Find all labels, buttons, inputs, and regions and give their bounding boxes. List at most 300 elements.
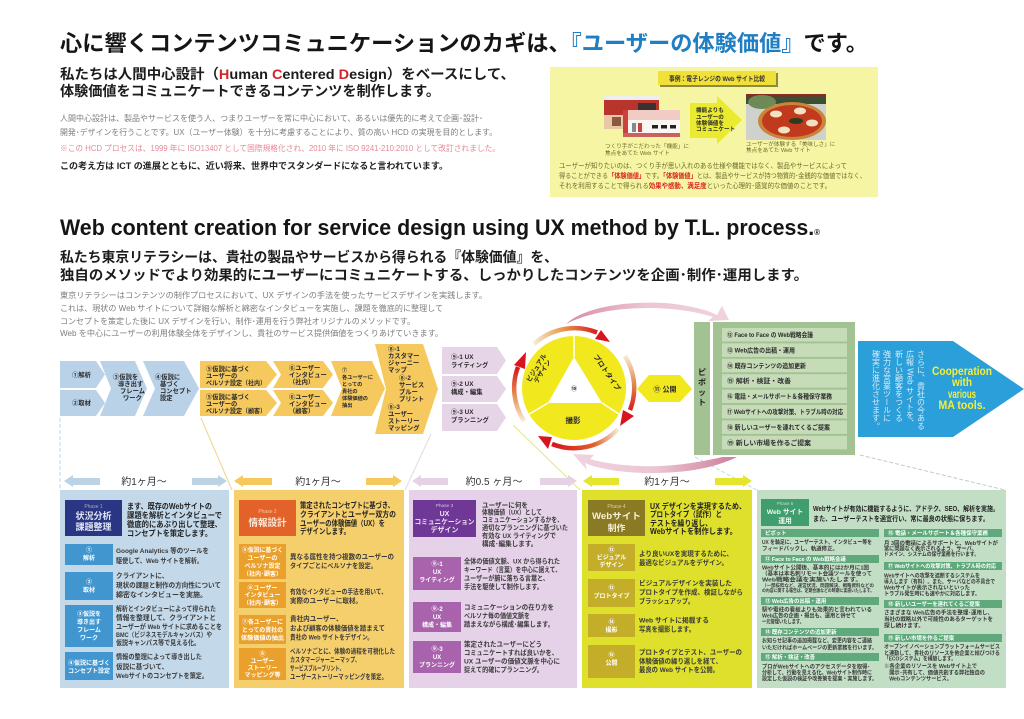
- step: visual design: ⑫: [608, 546, 615, 554]
- text block: method description: コンセプトを策定した後に UX デザインを行い、制作･運用を行う弊社オリジナルのメソッドです。: [60, 316, 415, 326]
- timeline: phase 2: [234, 475, 402, 488]
- timeline: phase 3: [412, 475, 577, 488]
- step: UX planning: [413, 640, 560, 674]
- process: purple phase chevrons: 構成・編集: [451, 387, 483, 396]
- step: UX planning: プランニング: [419, 661, 455, 669]
- callout: MA tools arrow: さらに、貴社の今ある: [916, 350, 926, 430]
- step: framework: 解析とインタビューによって得られた: [116, 604, 216, 613]
- step: publish: 最良の Web サイトを公開。: [639, 665, 719, 674]
- process: purple phase chevrons: ⑨-2 UX: [451, 379, 474, 388]
- process: blue phase chevrons: 導き出す: [118, 379, 143, 388]
- process: yellow phase chevrons: （顧客）: [289, 406, 314, 415]
- timeline: phase 4: 約1ヶ月〜: [644, 475, 690, 488]
- process: yellow phase chevrons: ⑧-3: [388, 402, 400, 411]
- step: analysis: Google Analytics 等のツールを: [116, 546, 209, 555]
- step: user interview: [239, 582, 387, 608]
- process: yellow phase chevrons: ⑤仮説に基づく: [206, 364, 250, 373]
- block: security: Webサイトが表示されないといった: [884, 584, 970, 592]
- panel: phase 2: [234, 490, 404, 688]
- process: yellow phase chevrons: ユーザー: [388, 409, 413, 418]
- block: web ads: 駅や電柱の看板よりも効果的と言われている: [762, 606, 872, 614]
- phase 3 header: Phase 3: [436, 503, 454, 509]
- step: visual design: デザイン: [599, 561, 624, 569]
- step: visual design: ビジュアル: [597, 554, 626, 562]
- block: pivot: ピボット: [765, 529, 787, 537]
- block: new users: 当社の戦略以外で可能性のあるターゲットを: [884, 615, 993, 623]
- step: photography: 写真を撮影します。: [639, 624, 695, 634]
- step: persona: 異なる属性を持つ複数のユーザーの: [290, 552, 394, 561]
- step: story mapping: マッピング等: [244, 671, 281, 679]
- case title: 事例：電子レンジの Web サイト比較: [669, 74, 765, 83]
- heading: Tokyo Literacy statement: 独自のメソッドでより効果的にユーザーにコミュニケートする、しっかりしたコンテンツを企画･制作･運用します。: [60, 267, 808, 283]
- arrow: communicate value: 機能よりも: [696, 106, 724, 114]
- step: visual design: 最適なビジュアルをデザイン。: [639, 558, 728, 567]
- text block: HCD description: 人間中心設計は、製品やサービスを使う人、つまりユーザーを常に中心において、あるいは優先的に考えて企画･設計･: [60, 113, 483, 123]
- block: pivot: UX を軸足に、ユーザーテスト、インタビュー等を: [762, 538, 872, 546]
- phase 3 intro: 適切なプランニングに基づいた: [482, 523, 568, 532]
- callout: MA tools arrow: 強力な営業ツールに: [882, 349, 892, 422]
- phase 2 intro: [300, 500, 396, 536]
- phase 1 intro: 徹底的にあぶり出して整理、: [127, 519, 222, 529]
- process: blue phase chevrons: コンセプト: [160, 387, 191, 395]
- block: new markets: ※各企業のリソースを Webサイト上で: [884, 662, 977, 670]
- cycle label: visual design: ビジュアル: [524, 351, 549, 384]
- step: UX structure: UX: [433, 615, 441, 621]
- step: story mapping: ユーザー: [251, 657, 274, 665]
- step: interview: クライアントに、: [116, 571, 168, 580]
- phase 2 intro: 策定されたコンセプトに基づき、: [300, 500, 394, 510]
- chart: prototype cycle: [511, 325, 637, 451]
- step: concept: ④仮説に基づく: [68, 659, 110, 667]
- step: framework: 導き出す: [77, 618, 101, 626]
- phase 3 header: コミュニケーション: [414, 518, 474, 526]
- step: framework: ワーク: [80, 634, 98, 642]
- step: analysis: [65, 544, 209, 565]
- step: framework: [65, 604, 222, 647]
- text block: method description: これは、現状の Web サイトについて詳細な解析と綿密なインタビューを実施し、課題を徹底的に整理して: [60, 303, 443, 313]
- block: existing content: ⑭ 既存コンテンツの追加更新: [765, 628, 837, 636]
- photo: pizza: [746, 94, 826, 140]
- step: UX writing: ⑨-1: [431, 560, 443, 568]
- arrow: communicate value: [690, 96, 742, 144]
- process: yellow phase chevrons: 抽出: [342, 401, 352, 409]
- process: blue phase chevrons: フレーム: [120, 387, 145, 395]
- step: UX structure: 踏まえながら構成･編集します。: [464, 620, 554, 628]
- step: story mapping: ペルソナごとに、体験の過程を可視化した: [290, 646, 395, 656]
- phase 3 intro: ユーザーに何を: [482, 500, 528, 510]
- step: UX structure: ペルソナ毎の価値文脈を: [464, 611, 530, 620]
- process: yellow phase chevrons: インタビュー: [289, 370, 327, 379]
- step: visual design: より良いUXを実現するために、: [639, 549, 733, 558]
- title: 心に響くコンテンツコミュニケーションのカギは、『ユーザーの体験価値』です。: [60, 31, 868, 56]
- text block: case explanation: それを利用することで得られる効果や感動、満足度といった心理的･感覚的な価値のことです。: [559, 181, 831, 190]
- phase 1 intro: コンセプトを策定します。: [127, 528, 212, 538]
- panel: pivot label: [694, 322, 710, 455]
- block: security: トラブル発生時にも速やかに対応します。: [884, 590, 980, 598]
- process: purple phase chevrons: ライティング: [451, 360, 489, 369]
- process: yellow phase chevrons: 各ユーザーに: [342, 373, 373, 381]
- step: prototype: [588, 578, 743, 607]
- phase 1 intro: [127, 501, 222, 538]
- panel: phase 1: [60, 490, 229, 688]
- block: new users: [884, 600, 1002, 630]
- phase 4 header: [588, 500, 645, 536]
- step: persona: [239, 544, 394, 579]
- phase 2 header: [239, 500, 296, 536]
- panel: phase 3: [409, 490, 577, 688]
- arrow: communicate value: 体験価値を: [696, 119, 724, 127]
- heading: human centered design: 体験価値をコミュニケートできるコンテンツを制作します。: [60, 83, 440, 99]
- process: purple phase chevrons: プランニング: [451, 415, 489, 424]
- timeline: phase 2: 約1ヶ月〜: [295, 475, 341, 488]
- process: purple phase chevrons: ⑨-1 UX: [451, 352, 474, 361]
- panel: operation list: ⑰ Webサイトへの攻撃対策、トラブル時の対応: [727, 407, 844, 416]
- step: UX planning: UX ユーザーの価値文脈を中心に: [464, 656, 560, 666]
- step: persona: タイプごとにペルソナを設定。: [290, 561, 377, 570]
- step: photography: ⑭: [608, 618, 615, 626]
- block: face to face: Webサイト公開後、基本的には2か月に1回: [762, 564, 869, 572]
- phase 5 header: 運用: [778, 516, 792, 525]
- block: face to face: [761, 555, 879, 594]
- block: new users: さまざまな Web広告の手法を整理･運用し、: [884, 608, 993, 616]
- step: publish: 体験価値の繰り返しを経て、: [639, 656, 722, 666]
- step: framework: 仮説キャンパス等で見える化。: [116, 638, 200, 647]
- callout: MA tools arrow: 確実に進化させます。: [872, 349, 880, 430]
- block: face to face: Web戦略会議を実施いたします。: [762, 576, 862, 584]
- callout: MA tools arrow: 新しい顧客をつくる: [894, 350, 904, 422]
- phase 1 header: Phase 1: [84, 504, 103, 510]
- text block: HCD description: この考え方は ICT の進展とともに、近い将来、世界中でスタンダードになると言われています。: [60, 160, 448, 171]
- block: phone support: 月 3回の電話によるサポートと、Webサイトが: [884, 539, 998, 547]
- process: blue phase chevrons: ワーク: [123, 393, 142, 402]
- phase 1 header: 課題整理: [75, 521, 112, 532]
- process: yellow phase chevrons: プリント: [399, 395, 424, 403]
- block: face to face: （一部抜粋など、運営状況、問題解決、戦略資料などの: [762, 582, 874, 589]
- phase 2 intro: クライアントとユーザー双方の: [300, 509, 396, 519]
- panel: operation list: ⑭ 既存コンテンツの追加更新: [727, 361, 807, 370]
- phase 4 header: Webサイト: [592, 511, 641, 521]
- block: new markets: Webコンテンツサービス。: [884, 674, 952, 682]
- panel: operation list: ⑮ 解析・検証・改善: [727, 376, 792, 385]
- timeline: phase 1: [64, 475, 227, 488]
- step: UX writing: UX: [433, 570, 441, 576]
- phase 4 intro: UX デザインを実現するため、: [650, 501, 746, 511]
- block: new users: 探し続けます。: [884, 622, 924, 630]
- phase 1 header: [65, 500, 122, 536]
- panel: phase 4: [582, 490, 752, 688]
- callout: MA tools arrow: various: [948, 387, 976, 401]
- step: UX writing: 全体の価値文脈、UX から得られた: [464, 556, 560, 566]
- process: yellow phase chevrons: ⑤仮説に基づく: [206, 392, 250, 401]
- process: yellow phase chevrons: ペルソナ設定（社内）: [206, 378, 266, 387]
- step: persona: （社内･顧客）: [243, 570, 282, 578]
- step: prototype: ⑬: [608, 584, 615, 592]
- phase 3 header: [413, 500, 476, 537]
- block: analytics: [761, 653, 879, 682]
- timeline: phase 3: 約0.5 ヶ月〜: [466, 475, 522, 488]
- step: persona: ペルソナ設定: [244, 562, 281, 570]
- phase 4 intro: プロトタイプ（試作）と: [650, 509, 722, 519]
- step: concept: 仮説に基づいて、: [116, 662, 168, 671]
- block: face to face: （基本は本名刺リモート会議ツールを使って: [762, 570, 872, 578]
- phase 4 intro: [650, 501, 746, 536]
- block: new markets: ⑲ 新しい市場を作るご提案: [888, 634, 955, 642]
- step: user interview: 有効なインタビューの手法を用いて、: [290, 587, 387, 596]
- text block: method description: 東京リテラシーはコンテンツの制作プロセスにおいて、UX デザインの手法を使ったサービスデザインを実践します。: [60, 290, 487, 300]
- process: blue phase chevrons: [60, 361, 199, 416]
- step: publish: ⑮: [608, 651, 615, 659]
- callout: MA tools arrow: with: [951, 375, 972, 389]
- phase 4 intro: テストを繰り返し、: [650, 518, 712, 528]
- phase 2 header: 情報設計: [248, 517, 287, 529]
- step: UX writing: ライティング: [419, 576, 455, 584]
- caption: right site: 焦点をあてた Web サイト: [746, 146, 811, 154]
- timeline: phase 4: [583, 475, 752, 488]
- step: framework: ユーザーが Web サイトに求めることを: [116, 622, 222, 631]
- step: UX planning: 策定されたユーザーにどう: [464, 640, 542, 648]
- block: pivot: フィードバックし、軌道修正。: [762, 544, 838, 552]
- phase 5 intro: また、ユーザーテストを適宜行い、常に最良の状態に保ちます。: [813, 514, 989, 523]
- block: analytics: ⑮ 解析・検証・改善: [765, 653, 816, 661]
- block: web ads: ⑬ Web広告の出稿・運用: [765, 597, 826, 605]
- panel: pivot label: ッ: [698, 388, 706, 397]
- step: story mapping: ストーリー: [247, 665, 278, 672]
- process: yellow phase chevrons: とっての: [342, 381, 362, 388]
- block: web ads: 一元管理いたします。: [762, 618, 804, 626]
- process: yellow phase chevrons: [200, 344, 438, 434]
- step: interview: 綿密なインタビューを実施。: [116, 590, 207, 599]
- text block: HCD description: 開発･デザインを行うことです。UX（ユーザー体験）を十分に考慮することにより、質の高い HCD の実現を目的とします。: [60, 127, 497, 137]
- block: new markets: 「ECOシステム」を構築します。: [884, 654, 956, 662]
- step: story mapping: ユーザーストーリーマッピングを策定。: [290, 672, 387, 681]
- process: purple phase chevrons: [442, 347, 506, 431]
- block: security: Webサイトへの攻撃を遮断するシステムを: [884, 572, 980, 580]
- phase 2 intro: ユーザーの体験価値（UX）を: [300, 518, 385, 528]
- case title: [658, 71, 778, 87]
- arrow: lower pink arc: [573, 454, 737, 473]
- timeline: phase durations: [64, 475, 752, 488]
- process: blue phase chevrons: ③仮説を: [113, 372, 138, 381]
- step: value extraction: および顧客の体験価値を踏まえて: [290, 624, 385, 632]
- block: face to face: ⑫ Face to Face の Web戦略会議: [765, 555, 846, 563]
- process: blue phase chevrons: 設定: [160, 394, 173, 402]
- step: UX writing: 手法を駆使して制作します。: [464, 582, 543, 591]
- step: user interview: （社内･顧客）: [243, 599, 282, 607]
- panel: microwave case study: [550, 67, 878, 197]
- phase 3 intro: 体験価値（UX）として: [482, 508, 542, 516]
- step: persona: ⑤仮説に基づく: [242, 546, 283, 554]
- block: phone support: ドメイン、システムの保守業務を行います。: [884, 550, 979, 558]
- panel: pivot label: ト: [698, 398, 706, 407]
- cycle label: number: ⑩: [571, 385, 577, 393]
- process: yellow phase chevrons: マッピング: [388, 423, 420, 432]
- process: yellow phase chevrons: ジャーニー: [388, 359, 419, 367]
- phase 3 intro: [482, 500, 568, 548]
- panel: operation list: ⑯ 電話・メールサポート＆各種保守業務: [727, 392, 833, 401]
- step: interview: ②: [86, 578, 92, 586]
- step: analysis: ①: [86, 546, 92, 554]
- caption: left site: [605, 142, 689, 157]
- step: photography: [588, 614, 709, 637]
- phase 2 intro: デザインします。: [300, 526, 350, 536]
- ring arrows: [514, 328, 634, 448]
- process: blue phase chevrons: ①解析: [72, 370, 92, 379]
- process: blue phase chevrons: ④仮説に: [155, 372, 180, 381]
- caption: left site: 焦点をあてた Web サイト: [605, 149, 670, 157]
- process: yellow phase chevrons: ⑥ユーザー: [289, 363, 320, 372]
- step: story mapping: [239, 646, 395, 681]
- phase 4 header: 制作: [608, 522, 625, 533]
- hexagon: publish: [637, 375, 692, 402]
- cycle label: prototype: プロトタイプ: [592, 353, 623, 393]
- step: value extraction: [239, 614, 385, 644]
- step: prototype: ビジュアルデザインを実装した: [639, 578, 732, 588]
- step: value extraction: 貴社の Web サイトをデザイン。: [290, 632, 373, 642]
- panel: phase 5: [757, 490, 1006, 688]
- step: UX writing: [413, 556, 561, 591]
- phase 4 header: Phase 4: [607, 504, 626, 510]
- block: web ads: [761, 597, 879, 626]
- step: user interview: 実際のユーザーに取材。: [290, 596, 362, 605]
- step: framework: フレーム: [77, 627, 101, 634]
- process: yellow phase chevrons: ユーザーの: [206, 371, 237, 380]
- step: value extraction: 貴社内ユーザー、: [290, 614, 343, 623]
- block: phone support: [884, 529, 1002, 558]
- text block: HCD description: ※この HCD プロセスは、1999 年に ISO13407 として国際規格化され、2010 年に ISO 9241-210:2010 として改訂されました。: [60, 143, 500, 153]
- screenshot: function-focused site: [604, 96, 680, 137]
- step: value extraction: ⑦各ユーザーに: [242, 618, 283, 626]
- process: yellow phase chevrons: ⑥ユーザー: [289, 392, 320, 401]
- text block: case explanation: 得ることができる「体験価値」です。「体験価値」とは、製品やサービスが持つ物質的･金銭的な価値ではなく、: [559, 171, 866, 180]
- phase 3 header: UX: [440, 511, 450, 518]
- step: interview: 取材: [83, 586, 95, 594]
- step: prototype: ブラッシュアップ。: [639, 596, 694, 606]
- block: security: ⑰ Webサイトへの攻撃対策、トラブル時の対応: [888, 562, 997, 570]
- connector lines: [60, 418, 1005, 490]
- phase 2 header: Phase 2: [258, 509, 277, 515]
- arrow: communicate value: コミュニケート: [696, 125, 735, 133]
- block: existing content: お知らせ記事の追加掲載など、変更内容をご連絡: [762, 636, 872, 644]
- timeline: phase 1: 約1ヶ月〜: [121, 475, 167, 488]
- process: yellow phase chevrons: ⑧-2: [399, 373, 411, 382]
- phase 5 header: Phase 5: [777, 501, 794, 506]
- phase 1 intro: ます、既存のWebサイトの: [127, 501, 212, 511]
- phase 3 header: デザイン: [430, 525, 458, 534]
- process: yellow phase chevrons: ⑦: [342, 366, 348, 374]
- panel: pivot label: ピ: [698, 368, 706, 377]
- step: value extraction: とっての貴社の: [242, 626, 283, 634]
- block: analytics: 設定した仮説の検証や改善策を提案・実施します。: [762, 674, 877, 682]
- callout: MA tools arrow: 広報 Web サイトを、: [906, 350, 914, 427]
- block: new users: ⑱ 新しいユーザーを連れてくるご提案: [888, 600, 981, 608]
- heading: Tokyo Literacy statement: [60, 249, 808, 283]
- process: yellow phase chevrons: ペルソナ設定（顧客）: [206, 406, 266, 415]
- process: yellow phase chevrons: ブルー: [399, 387, 418, 396]
- arrow: upper pink arc: [566, 303, 729, 324]
- caption: right site: ユーザーが体験する「美味しさ」に: [746, 140, 836, 148]
- phase 3 intro: 有効な UX ライティングで: [482, 531, 556, 540]
- step: photography: 撮影: [605, 626, 618, 634]
- block: pivot: [761, 529, 879, 552]
- heading: web content creation: Web content creation for service design using UX method by T.L. process.®: [60, 215, 820, 240]
- arrow: communicate value: ユーザーの: [696, 113, 724, 121]
- step: story mapping: ⑧: [259, 650, 266, 658]
- phase 5 header: [761, 499, 809, 526]
- process: yellow phase chevrons: ユーザーの: [206, 399, 237, 408]
- block: face to face: の内容に関する報告は、定期会議などの時期に実施いたします。: [762, 587, 874, 594]
- block: new markets: オープンイノベーションプラットフォームサービス: [884, 642, 1000, 650]
- process: blue phase chevrons: ②取材: [72, 398, 92, 407]
- step: publish: [588, 645, 742, 678]
- step: UX structure: ⑨-2: [431, 605, 443, 613]
- callout: MA tools arrow: [858, 341, 1024, 437]
- process: purple phase chevrons: ⑨-3 UX: [451, 407, 474, 416]
- block: web ads: Web広告の企画・掲出も、運用と併せて: [762, 612, 856, 620]
- step: analysis: 解析: [83, 554, 95, 562]
- step: UX structure: [413, 602, 554, 632]
- step: framework: ③仮説を: [77, 610, 101, 618]
- panel: operation list: ⑬ Web広告の出稿・運用: [727, 345, 795, 354]
- step: UX planning: ⑨-3: [431, 645, 443, 653]
- panel: pivot label: ボ: [698, 377, 706, 387]
- panel: operation list: [713, 322, 855, 455]
- heading: Tokyo Literacy statement: 私たち東京リテラシーは、貴社の製品やサービスから得られる『体験価値』を、: [60, 249, 558, 265]
- step: interview: [65, 571, 221, 600]
- step: UX writing: キーワード（言葉）を中心に据えて、: [464, 565, 561, 574]
- panel: operation list: ⑲ 新しい市場を作るご提案: [727, 438, 812, 447]
- phase 5 intro: [813, 504, 999, 523]
- step: concept: [65, 652, 208, 680]
- phase 1 header: 状況分析: [75, 510, 112, 521]
- callout: MA tools arrow: MA tools.: [938, 398, 986, 412]
- step: UX writing: ユーザーが腑に落ちる言葉と、: [464, 574, 549, 582]
- block: new markets: [884, 634, 1002, 682]
- callout: MA tools arrow: Cooperation: [932, 364, 992, 378]
- phase 5 header: Web サイト: [767, 508, 803, 516]
- step: analysis: 駆使して、Web サイトを解析。: [116, 556, 203, 565]
- step: framework: 情報を整理して、クライアントと: [116, 613, 216, 622]
- phase 1 intro: 課題を解析とインタビューで: [127, 510, 222, 520]
- phase 3 intro: コミュニケーションするかを、: [482, 516, 563, 524]
- block: analytics: 分析して、行動を見える化。Webサイト制作時に: [762, 668, 872, 676]
- text block: case explanation: [559, 161, 866, 190]
- step: story mapping: カスタマージャーニーマップ、: [290, 655, 360, 664]
- step: persona: ユーザーの: [248, 554, 277, 562]
- step: visual design: [588, 544, 733, 571]
- step: UX planning: UX: [433, 655, 441, 661]
- process: yellow phase chevrons: マップ: [388, 366, 408, 374]
- process: yellow phase chevrons: カスタマー: [388, 351, 419, 360]
- process: yellow phase chevrons: ⑧-1: [388, 344, 400, 353]
- block: new markets: 開示･共有して、価値共創する弊社独自の: [884, 668, 985, 676]
- step: publish: プロトタイプとテスト、ユーザーの: [639, 648, 742, 656]
- panel: operation list: ⑫ Face to Face の Web戦略会議: [727, 330, 814, 339]
- panel: operation list: ⑱ 新しいユーザーを連れてくるご提案: [727, 422, 831, 431]
- process: blue phase chevrons: 基づく: [160, 379, 179, 388]
- text block: method description: Web を中心にユーザーの利用体験全体をデザインし、貴社のサービス提供価値をつくりあげていきます。: [60, 328, 443, 338]
- step: interview: 現状の課題と制作の方向性について: [116, 580, 221, 590]
- caption: right site: [746, 140, 836, 154]
- process: yellow phase chevrons: サービス: [399, 380, 424, 389]
- cycle label: visual design: デザイン: [531, 357, 553, 385]
- step: concept: 情報の整理によって導き出した: [116, 652, 202, 661]
- block: analytics: プロがWebサイトへのアクセスデータを取得･: [762, 662, 870, 670]
- process: yellow phase chevrons: （社内）: [289, 377, 314, 386]
- step: user interview: インタビュー: [244, 591, 281, 599]
- block: phone support: 常に問題なく表示されるよう、サーバ、: [884, 544, 977, 552]
- cycle label: photography: 撮影: [566, 415, 581, 425]
- caption: left site: つくり手がこだわった「機能」に: [605, 142, 689, 150]
